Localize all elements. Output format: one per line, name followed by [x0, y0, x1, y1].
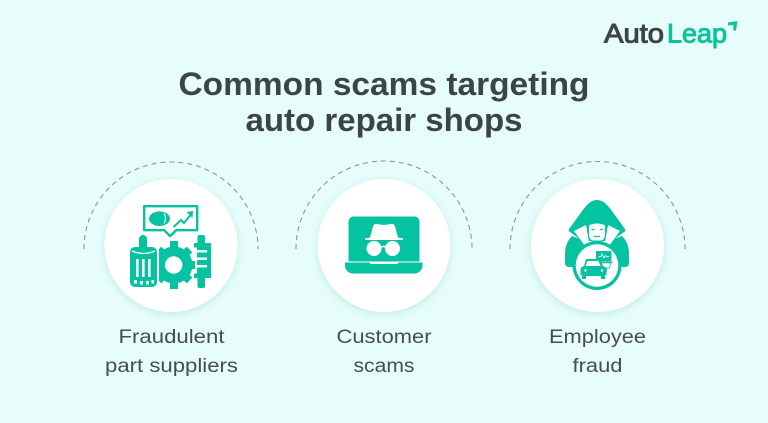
logo: AutoLeap — [604, 18, 738, 48]
title — [178, 66, 590, 138]
panel: employee fraud — [510, 162, 685, 312]
label: fraudulent part suppliers: part suppliers — [105, 356, 238, 377]
dashed arc 2 — [296, 161, 472, 249]
panel: customer scams — [296, 161, 472, 312]
icon: parts, gear and price bubble — [129, 206, 211, 289]
white circle 3 — [531, 179, 664, 312]
logo: AutoLeap: Leap — [667, 18, 727, 48]
white circle 2 — [318, 179, 450, 312]
label: fraudulent part suppliers: Fraudulent — [118, 327, 225, 348]
label: employee fraud: Employee — [549, 327, 646, 348]
label: customer scams: Customer — [336, 327, 432, 348]
label: employee fraud — [549, 327, 646, 377]
label: customer scams: scams — [354, 356, 414, 377]
dashed arc 3 — [510, 162, 685, 249]
title: auto repair shops — [246, 102, 522, 138]
dashed arc 1 — [84, 162, 258, 249]
panel: fraudulent part suppliers — [84, 162, 258, 312]
icon: laptop with incognito hat — [345, 216, 422, 274]
title: Common scams targeting — [178, 66, 590, 102]
label: employee fraud: fraud — [572, 356, 622, 377]
logo: AutoLeap: Auto — [604, 18, 664, 48]
icon: hooded figure with car diagnostics — [565, 200, 629, 290]
label: fraudulent part suppliers — [105, 327, 238, 377]
white circle 1 — [104, 179, 238, 312]
label: customer scams — [336, 327, 432, 377]
